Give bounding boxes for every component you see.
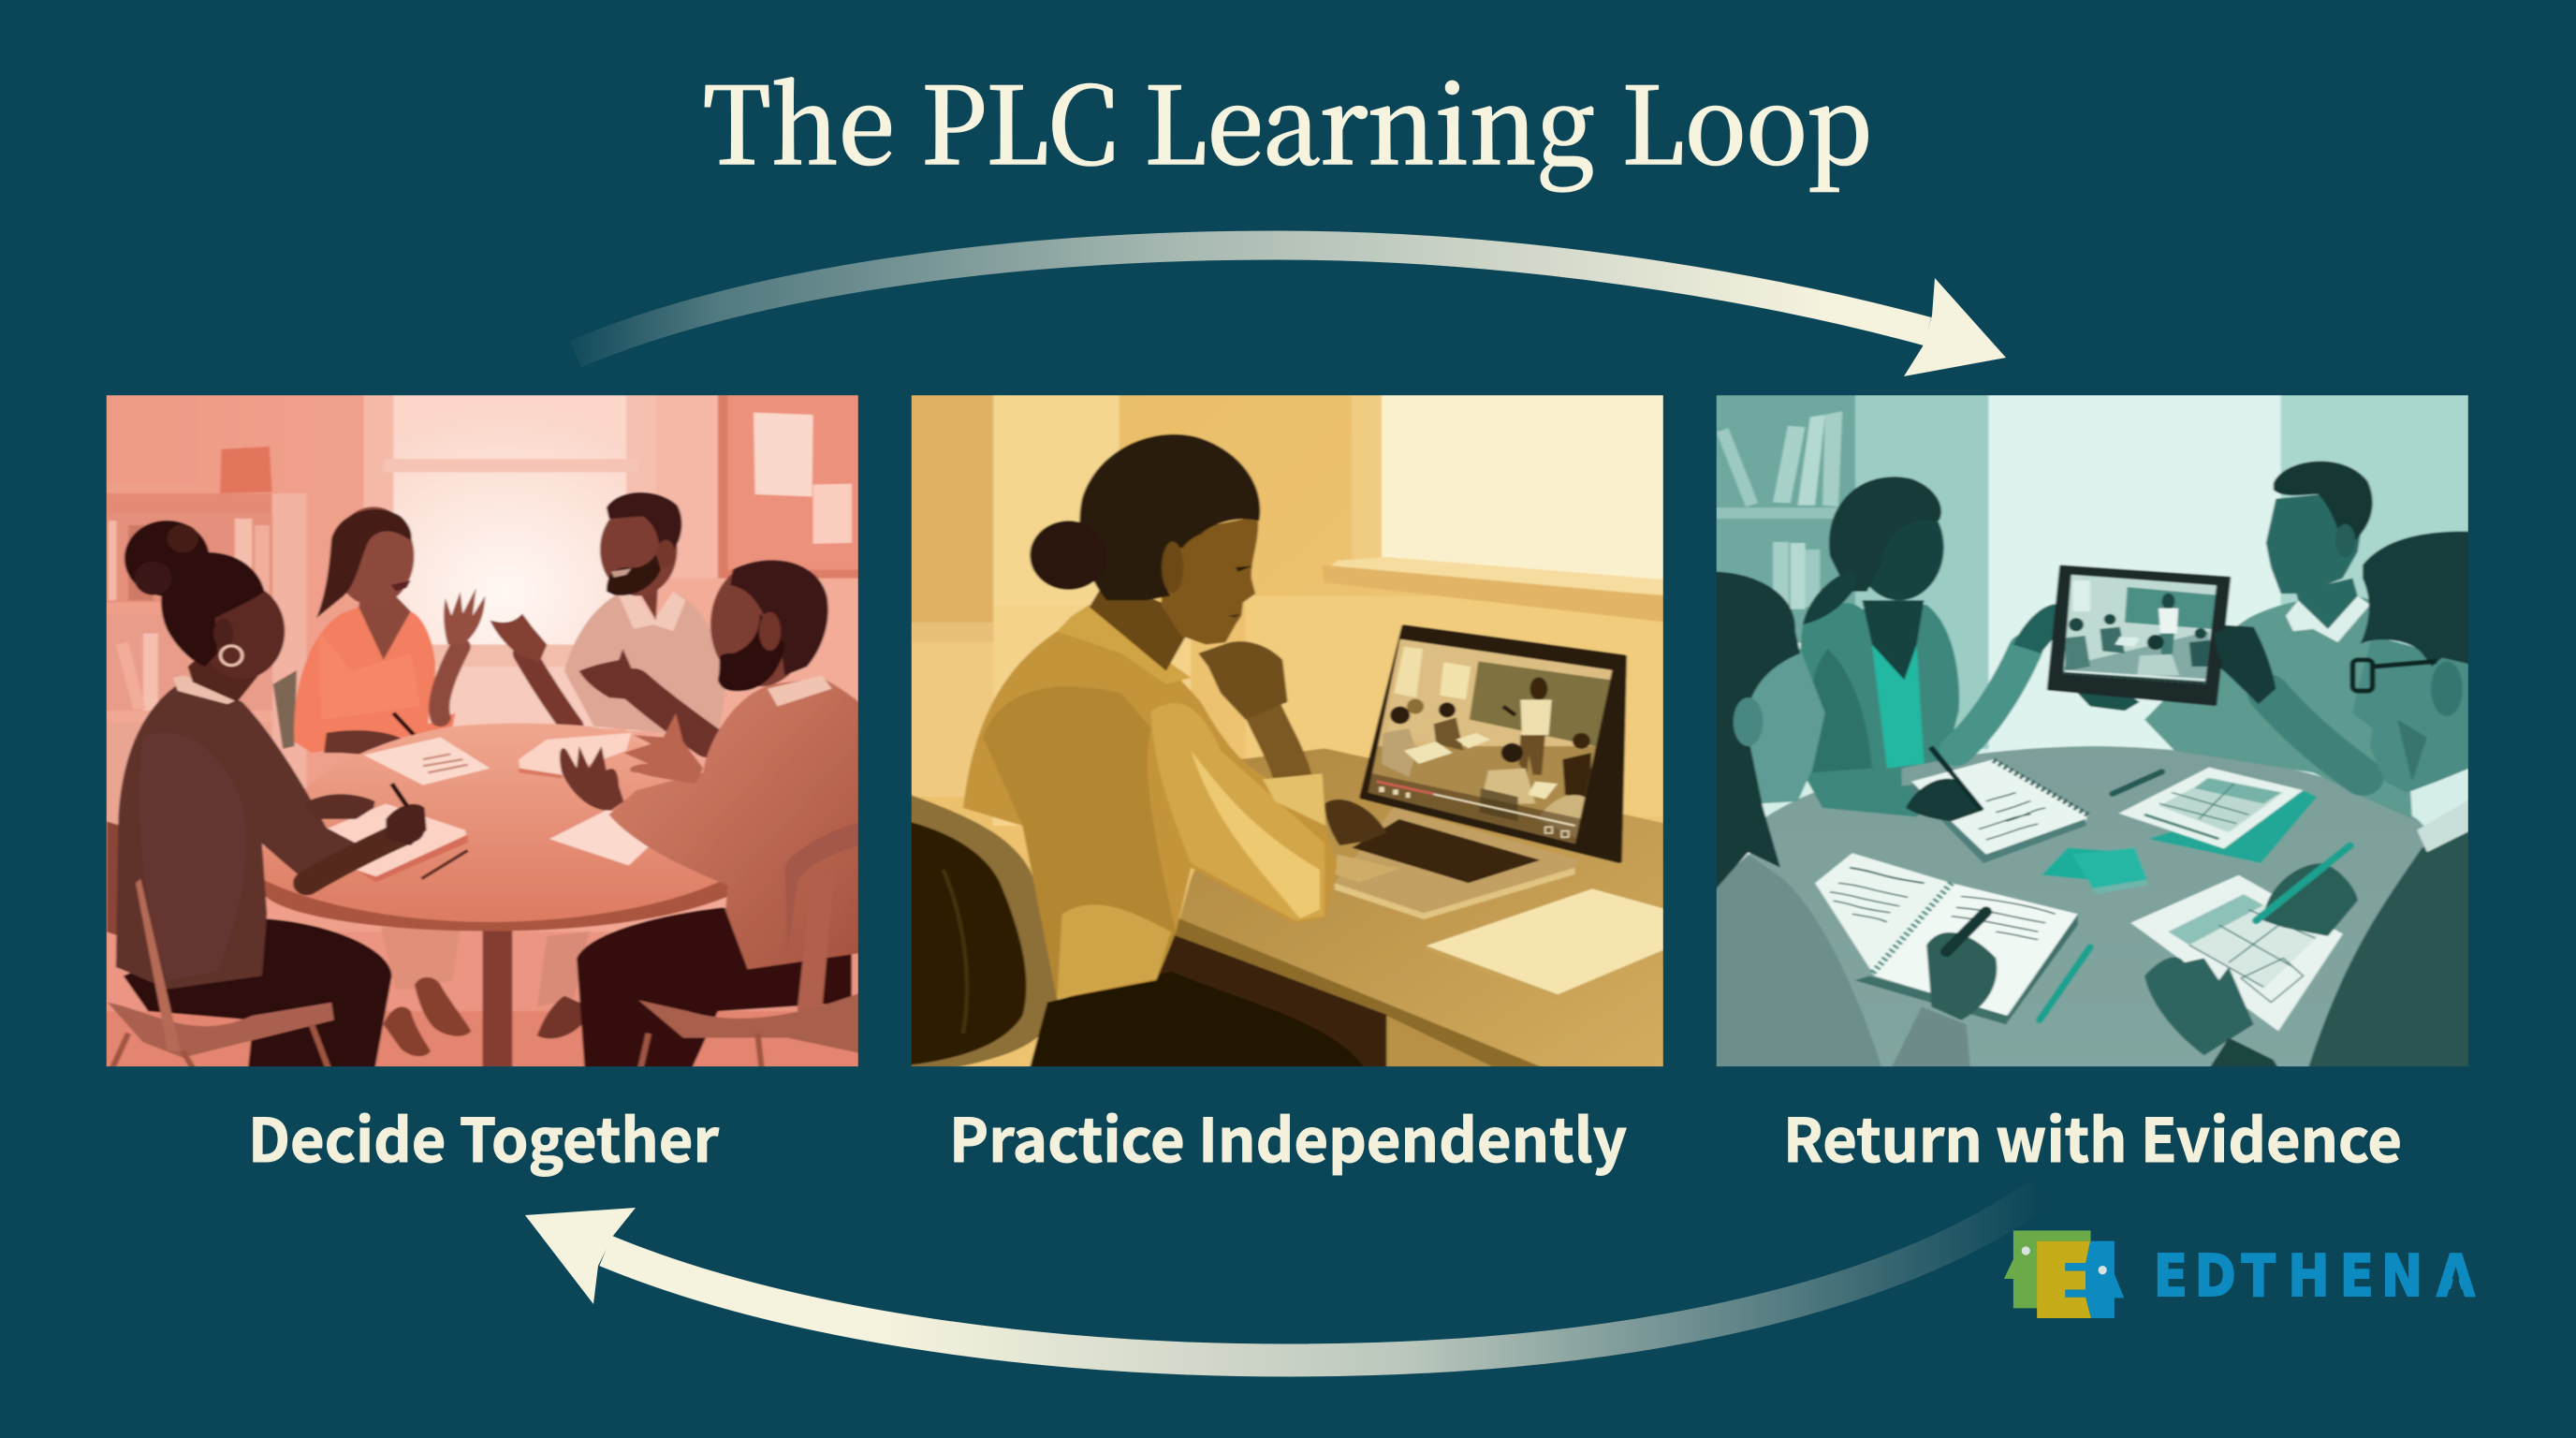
- label: Return with Evidence: Return with Evidence: [1783, 1093, 2402, 1180]
- window: [363, 384, 656, 731]
- rubric on teal folder: [2119, 768, 2317, 863]
- man in light shirt: [490, 492, 725, 1038]
- bookshelf: [1717, 395, 1857, 644]
- woman, foreground left: [1704, 571, 1997, 1077]
- title: The PLC Learning Loop: [703, 41, 1872, 195]
- woman in coral top: [273, 506, 485, 1056]
- classroom video on laptop screen: [1368, 639, 1612, 845]
- papers on table: [324, 733, 676, 882]
- label: Practice Independently: Practice Independently: [949, 1093, 1627, 1180]
- office chair: [912, 794, 1060, 1067]
- logo: Edthena: [2004, 1230, 2476, 1318]
- arrow: bottom arc returning to Decide Together: [525, 1194, 2040, 1360]
- laptop: [1335, 627, 1624, 919]
- arrow: top arc from Decide Together to Return with Evidence: [576, 245, 2006, 376]
- teal sticky notes: [2042, 848, 2147, 894]
- paper: [1427, 888, 1676, 994]
- woman with bun, foreground left: [107, 521, 427, 1077]
- left wall panel: [912, 395, 994, 622]
- logo: Edthena: EDTHENA: [2154, 1243, 2475, 1310]
- pen on table: [2113, 771, 2162, 794]
- assessment sheet: [2130, 845, 2358, 1055]
- round table: [1749, 745, 2425, 1067]
- tablet with classroom video: [2049, 566, 2229, 704]
- woman with ponytail: [1799, 477, 2065, 819]
- floor: [137, 932, 858, 1011]
- spiral notebook: [1906, 747, 2087, 863]
- teal pen on table: [2040, 947, 2090, 1020]
- man with collared sweater: [2078, 462, 2412, 819]
- hand on tablet: [2215, 629, 2225, 659]
- panel: Decide Together illustration: [107, 395, 858, 1067]
- panel: Practice Independently illustration: [912, 395, 1663, 1067]
- teacher at desk: [963, 434, 1386, 1077]
- panel: Return with Evidence illustration: [1717, 395, 2468, 1067]
- man with glasses, foreground right: [2204, 532, 2481, 1077]
- bulletin board: [717, 395, 858, 579]
- bookshelf: [94, 447, 307, 829]
- desk: [1157, 748, 1663, 1067]
- window with sill: [1323, 384, 1676, 624]
- round table: [257, 723, 728, 1077]
- open notebook: [1815, 853, 2078, 1024]
- man with beard, foreground right: [560, 560, 871, 1077]
- label: Decide Together: Decide Together: [248, 1093, 719, 1180]
